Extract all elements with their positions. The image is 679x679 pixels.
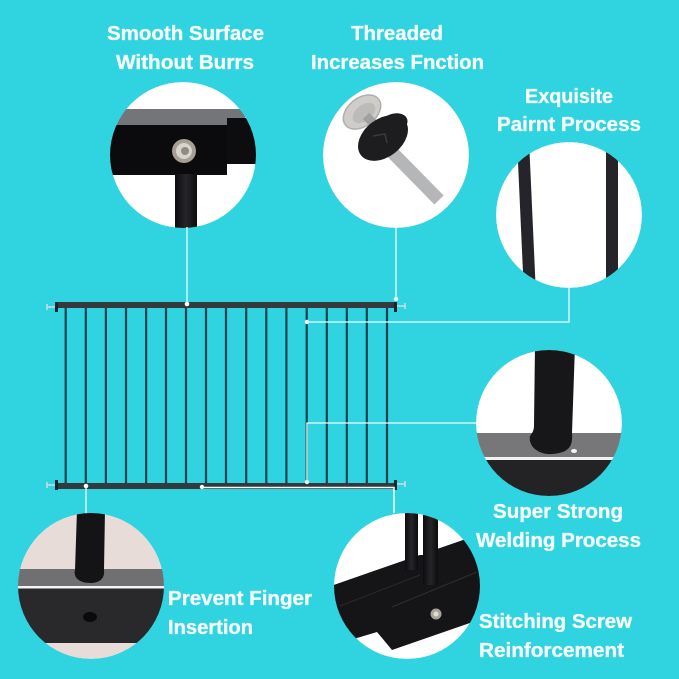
connector: paint process <box>305 288 569 324</box>
circle: paint process detail <box>496 140 642 295</box>
connector: stitching screw <box>200 485 394 513</box>
heading: Super Strong Welding Process: Super Strong <box>493 501 623 523</box>
heading: Smooth Surface Without Burrs <box>107 23 264 74</box>
icon: bolt head <box>172 139 196 163</box>
heading: Smooth Surface Without Burrs: Smooth Surface <box>107 23 264 45</box>
heading: Exquisite Pairnt Process: Pairnt Process <box>497 114 641 136</box>
bottom rail <box>56 483 395 489</box>
heading: Stitching Screw Reinforcement <box>479 611 632 662</box>
heading: Threaded Increases Fnction: Threaded <box>351 23 443 45</box>
circle: threaded foot detail <box>323 82 469 228</box>
connector: welding <box>305 423 476 484</box>
connector: finger insertion <box>84 484 88 513</box>
connector: smooth surface <box>185 227 189 306</box>
heading: Smooth Surface Without Burrs: Without Burrs <box>116 52 254 74</box>
circle: stitching screw detail <box>334 513 480 659</box>
heading: Exquisite Pairnt Process: Exquisite <box>525 86 613 108</box>
circle: smooth surface detail <box>105 82 262 230</box>
heading: Threaded Increases Fnction <box>311 23 484 74</box>
heading: Prevent Finger Insertion: Insertion <box>168 617 253 639</box>
icon: stitching screw <box>430 608 442 620</box>
adjuster screws <box>47 303 405 488</box>
connector: threaded <box>394 228 398 301</box>
heading: Stitching Screw Reinforcement: Stitching Screw <box>479 611 632 633</box>
heading: Super Strong Welding Process: Welding Process <box>476 530 641 552</box>
gate illustration <box>47 302 405 490</box>
icon: screw hole <box>83 612 97 622</box>
heading: Stitching Screw Reinforcement: Reinforcement <box>479 640 624 662</box>
vertical bars <box>66 306 387 485</box>
heading: Exquisite Pairnt Process <box>497 86 641 136</box>
icon: black knob <box>358 113 408 161</box>
end caps <box>55 302 397 490</box>
circle: finger insertion detail <box>15 510 170 659</box>
heading: Super Strong Welding Process <box>476 501 641 552</box>
heading: Prevent Finger Insertion <box>168 588 312 639</box>
top rail <box>56 302 395 308</box>
heading: Threaded Increases Fnction: Increases Fnction <box>311 52 484 74</box>
heading: Prevent Finger Insertion: Prevent Finger <box>168 588 312 610</box>
circle: welding detail <box>476 350 622 496</box>
